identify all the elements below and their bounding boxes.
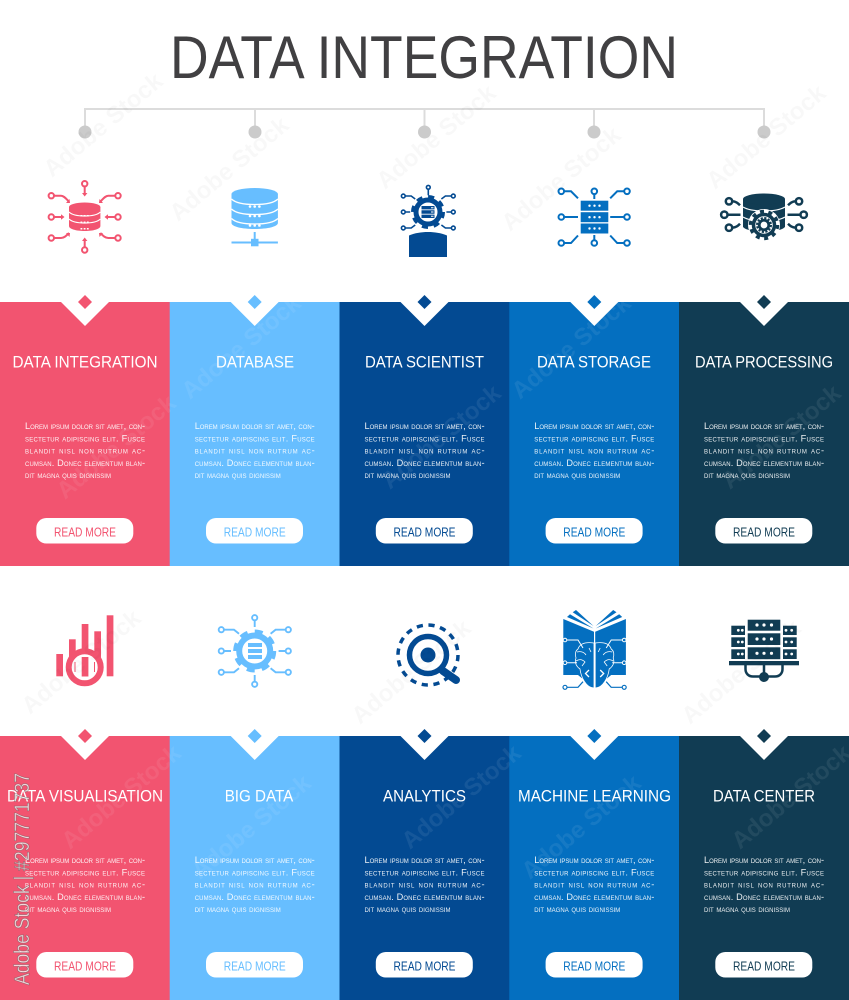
panel: database: dit magna quis dignissim xyxy=(195,470,281,480)
panel: big data: BIG DATA xyxy=(225,787,294,806)
panel: data visualisation: blandit nisl non rutrum ac- xyxy=(25,880,145,890)
panel: analytics xyxy=(340,729,510,1000)
panel: data center: Lorem ipsum dolor sit amet, con- xyxy=(704,855,824,865)
panel: data scientist: DATA SCIENTIST xyxy=(365,353,484,372)
panel: database xyxy=(170,295,340,566)
panel: machine learning: READ MORE xyxy=(563,959,626,974)
panel: data center: blandit nisl non rutrum ac- xyxy=(704,880,824,890)
panel: machine learning: dit magna quis dignissim xyxy=(534,904,620,914)
watermarks: Adobe Stock xyxy=(372,79,502,195)
panel: data storage: READ MORE xyxy=(563,525,626,540)
panel: data visualisation: READ MORE xyxy=(54,959,116,974)
panel: data visualisation: Lorem ipsum dolor sit amet, con- xyxy=(25,855,145,865)
watermarks: Adobe Stock xyxy=(57,739,187,855)
panel: analytics: READ MORE xyxy=(394,959,456,974)
panel: data processing: blandit nisl non rutrum ac- xyxy=(704,446,824,456)
watermarks: Adobe Stock xyxy=(187,769,317,885)
panel: data center: READ MORE xyxy=(733,959,795,974)
watermarks: Adobe Stock xyxy=(17,604,147,720)
watermarks: Adobe Stock xyxy=(677,614,807,730)
panel: analytics: sectetur adipiscing elit. Fusce xyxy=(364,867,484,877)
panel: data center: DATA CENTER xyxy=(713,787,815,806)
panel: data processing: dit magna quis dignissim xyxy=(704,470,790,480)
panel: big data: dit magna quis dignissim xyxy=(195,904,281,914)
panel: analytics: cumsan. Donec elementum blan- xyxy=(364,892,484,902)
panel: data scientist: sectetur adipiscing elit. Fusce xyxy=(364,433,484,443)
panel: data center: dit magna quis dignissim xyxy=(704,904,790,914)
panel: data storage: Lorem ipsum dolor sit amet, con- xyxy=(534,421,654,431)
panel: data scientist: cumsan. Donec elementum blan- xyxy=(364,458,484,468)
icon: data visualisation xyxy=(56,615,113,683)
panel: data storage: blandit nisl non rutrum ac- xyxy=(534,446,654,456)
watermarks: Adobe Stock xyxy=(177,289,307,405)
panel: machine learning: Lorem ipsum dolor sit amet, con- xyxy=(534,855,654,865)
panel: big data: Lorem ipsum dolor sit amet, con- xyxy=(195,855,315,865)
panel: data integration xyxy=(0,295,170,566)
panel: data scientist: blandit nisl non rutrum ac- xyxy=(364,446,484,456)
watermarks: Adobe Stock xyxy=(347,614,477,730)
icon: data center xyxy=(729,620,799,682)
watermarks: Adobe Stock xyxy=(39,67,169,183)
panel: data center: sectetur adipiscing elit. Fusce xyxy=(704,867,824,877)
watermarks: Adobe Stock xyxy=(52,389,182,505)
panel: analytics: Lorem ipsum dolor sit amet, con- xyxy=(364,855,484,865)
panel: data scientist: dit magna quis dignissim xyxy=(364,470,450,480)
panel: database: Lorem ipsum dolor sit amet, con- xyxy=(195,421,315,431)
panel: data visualisation xyxy=(0,729,170,1000)
panel: big data xyxy=(170,729,340,1000)
panel: database: cumsan. Donec elementum blan- xyxy=(195,458,315,468)
watermarks: Adobe Stock xyxy=(717,379,847,495)
icon: big data xyxy=(219,615,291,687)
panel: data center: cumsan. Donec elementum blan- xyxy=(704,892,824,902)
panel: data storage: cumsan. Donec elementum blan- xyxy=(534,458,654,468)
panel: big data: sectetur adipiscing elit. Fusce xyxy=(195,867,315,877)
icon: analytics xyxy=(398,625,458,685)
watermarks: Adobe Stock xyxy=(702,79,832,195)
panel: data storage: sectetur adipiscing elit. Fusce xyxy=(534,433,654,443)
panel: database: blandit nisl non rutrum ac- xyxy=(195,446,315,456)
panel: data visualisation: sectetur adipiscing elit. Fusce xyxy=(25,867,145,877)
panel: data storage: DATA STORAGE xyxy=(537,353,651,372)
panel: data visualisation: dit magna quis dignissim xyxy=(25,904,111,914)
panel: analytics: blandit nisl non rutrum ac- xyxy=(364,880,484,890)
panel: data storage xyxy=(509,295,679,566)
panel: machine learning: cumsan. Donec elementum blan- xyxy=(534,892,654,902)
icon: data integration database xyxy=(49,181,121,253)
panel: data integration: READ MORE xyxy=(54,525,116,540)
panel: big data: cumsan. Donec elementum blan- xyxy=(195,892,315,902)
panel: data scientist: Lorem ipsum dolor sit amet, con- xyxy=(364,421,484,431)
panel: database: READ MORE xyxy=(224,525,286,540)
icon: data scientist xyxy=(401,185,455,257)
panel: data processing: cumsan. Donec elementum blan- xyxy=(704,458,824,468)
panel: data integration: Lorem ipsum dolor sit amet, con- xyxy=(25,421,145,431)
panel: machine learning xyxy=(509,729,679,1000)
panel: data processing xyxy=(679,295,849,566)
icon: database xyxy=(232,188,278,246)
icon: machine learning xyxy=(563,610,626,689)
panel: data integration: blandit nisl non rutrum ac- xyxy=(25,446,145,456)
panel: machine learning: blandit nisl non rutrum ac- xyxy=(534,880,654,890)
watermarks: Adobe Stock xyxy=(497,121,627,237)
panel: machine learning: MACHINE LEARNING xyxy=(518,787,671,806)
watermarks: Adobe Stock xyxy=(507,289,637,405)
panel: data integration: cumsan. Donec elementum blan- xyxy=(25,458,145,468)
panel: data processing: READ MORE xyxy=(733,525,795,540)
title: DATA INTEGRATION xyxy=(170,23,678,91)
panel: data visualisation: cumsan. Donec elementum blan- xyxy=(25,892,145,902)
panel: data scientist xyxy=(340,295,510,566)
panel: data center xyxy=(679,729,849,1000)
panel: data integration: DATA INTEGRATION xyxy=(12,353,158,372)
panel: data processing: sectetur adipiscing elit. Fusce xyxy=(704,433,824,443)
panel: database: sectetur adipiscing elit. Fusce xyxy=(195,433,315,443)
panel: analytics: dit magna quis dignissim xyxy=(364,904,450,914)
panel: data storage: dit magna quis dignissim xyxy=(534,470,620,480)
watermarks: Adobe Stock xyxy=(517,769,647,885)
panel: data processing: Lorem ipsum dolor sit amet, con- xyxy=(704,421,824,431)
panel: analytics: ANALYTICS xyxy=(383,787,466,806)
watermarks: Adobe Stock xyxy=(377,379,507,495)
panel: data scientist: READ MORE xyxy=(394,525,456,540)
panel: big data: blandit nisl non rutrum ac- xyxy=(195,880,315,890)
stock id label: Adobe Stock | #297771737 xyxy=(11,773,34,985)
panel: data integration: sectetur adipiscing elit. Fusce xyxy=(25,433,145,443)
panel: data visualisation: DATA VISUALISATION xyxy=(7,787,163,806)
panel: database: DATABASE xyxy=(216,353,294,372)
panel: big data: READ MORE xyxy=(224,959,286,974)
connector tree xyxy=(78,109,770,138)
panel: machine learning: sectetur adipiscing elit. Fusce xyxy=(534,867,654,877)
icon: data processing xyxy=(721,194,807,241)
panel: data integration: dit magna quis dignissim xyxy=(25,470,111,480)
watermarks: Adobe Stock xyxy=(397,739,527,855)
watermarks: Adobe Stock xyxy=(165,111,295,227)
icon: data storage xyxy=(558,188,630,246)
